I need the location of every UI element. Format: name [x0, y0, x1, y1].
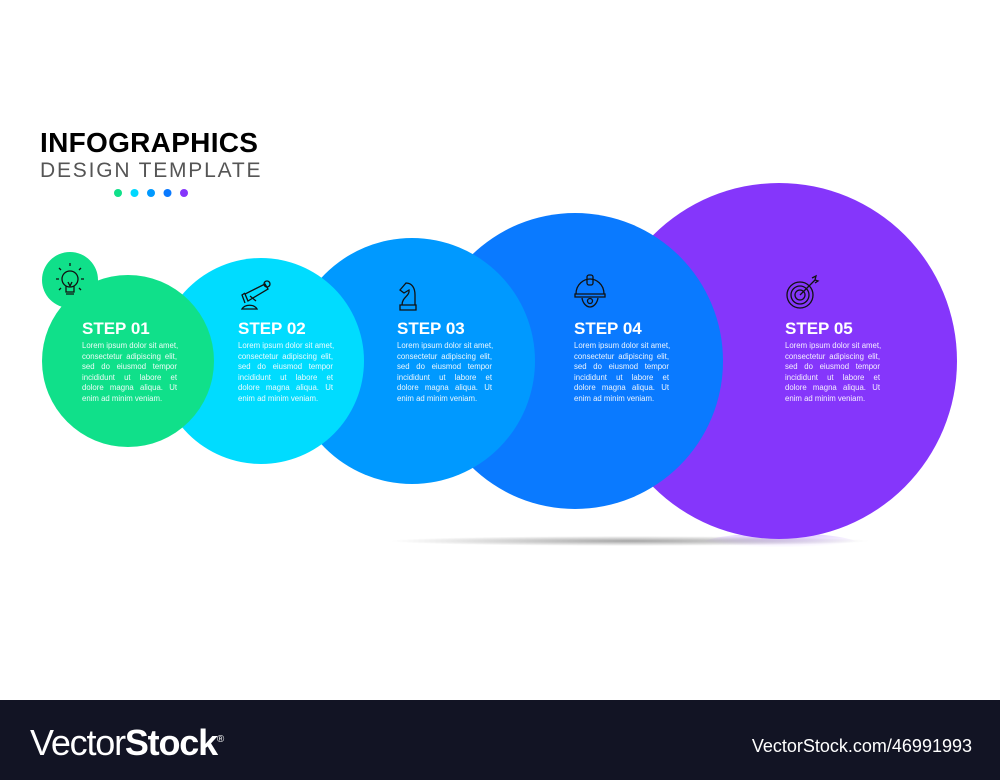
title: INFOGRAPHICS — [40, 127, 258, 158]
step 1 text: STEP 01 — [82, 319, 150, 338]
title: DESIGN TEMPLATE — [40, 159, 262, 182]
step 2 text: STEP 02 — [238, 319, 306, 338]
step 1 text: consectetur adipiscing elit, — [82, 352, 177, 361]
circle: step 3 — [289, 238, 535, 484]
icon: microscope — [242, 281, 270, 309]
step 3 text: STEP 03 — [397, 319, 465, 338]
step 2 text: incididunt ut labore et — [238, 373, 333, 382]
step 4 text: dolore magna aliqua. Ut — [574, 383, 669, 392]
step 1 text: enim ad minim veniam. — [82, 394, 162, 403]
step 3 text: consectetur adipiscing elit, — [397, 352, 492, 361]
step 5 text: enim ad minim veniam. — [785, 394, 865, 403]
icon: helmet gear — [575, 275, 605, 307]
step 3 text: enim ad minim veniam. — [397, 394, 477, 403]
step 4 text — [574, 319, 670, 403]
icon: chess knight — [400, 283, 416, 310]
shadow — [390, 536, 870, 546]
footer logo: VectorStock® — [30, 722, 223, 763]
circle: step 2 — [158, 258, 364, 464]
footer bar — [0, 700, 1000, 780]
circle: step 4 — [427, 213, 723, 509]
color dots — [114, 189, 188, 197]
icon: lightbulb — [56, 263, 84, 294]
step 5 text: sed do eiusmod tempor — [785, 362, 880, 371]
step 4 text: enim ad minim veniam. — [574, 394, 654, 403]
circle: step 5 — [601, 183, 957, 539]
step 1 text: sed do eiusmod tempor — [82, 362, 177, 371]
step 3 text: sed do eiusmod tempor — [397, 362, 492, 371]
footer id: VectorStock.com/46991993 — [752, 736, 972, 756]
step 3 text — [397, 319, 493, 403]
step 4 text: Lorem ipsum dolor sit amet, — [574, 341, 670, 350]
step 3 text: Lorem ipsum dolor sit amet, — [397, 341, 493, 350]
step 5 text: incididunt ut labore et — [785, 373, 880, 382]
icon: target — [787, 276, 818, 308]
step 3 text: incididunt ut labore et — [397, 373, 492, 382]
step 1 text — [82, 319, 178, 403]
step 1 text: Lorem ipsum dolor sit amet, — [82, 341, 178, 350]
step 1 text: dolore magna aliqua. Ut — [82, 383, 177, 392]
step 4 text: sed do eiusmod tempor — [574, 362, 669, 371]
step 5 text: Lorem ipsum dolor sit amet, — [785, 341, 881, 350]
step 4 text: incididunt ut labore et — [574, 373, 669, 382]
step 2 text: enim ad minim veniam. — [238, 394, 318, 403]
title — [40, 127, 262, 182]
step 5 text: STEP 05 — [785, 319, 853, 338]
step 2 text: consectetur adipiscing elit, — [238, 352, 333, 361]
step 4 text: consectetur adipiscing elit, — [574, 352, 669, 361]
step 5 text — [785, 319, 881, 403]
step 2 text: Lorem ipsum dolor sit amet, — [238, 341, 334, 350]
step 1 text: incididunt ut labore et — [82, 373, 177, 382]
step 2 text: sed do eiusmod tempor — [238, 362, 333, 371]
step 5 text: consectetur adipiscing elit, — [785, 352, 880, 361]
step 3 text: dolore magna aliqua. Ut — [397, 383, 492, 392]
step 2 text: dolore magna aliqua. Ut — [238, 383, 333, 392]
circle: step 1 — [42, 275, 214, 447]
step 5 text: dolore magna aliqua. Ut — [785, 383, 880, 392]
small circle: step 1 icon — [42, 252, 98, 308]
step 4 text: STEP 04 — [574, 319, 642, 338]
step 2 text — [238, 319, 334, 403]
